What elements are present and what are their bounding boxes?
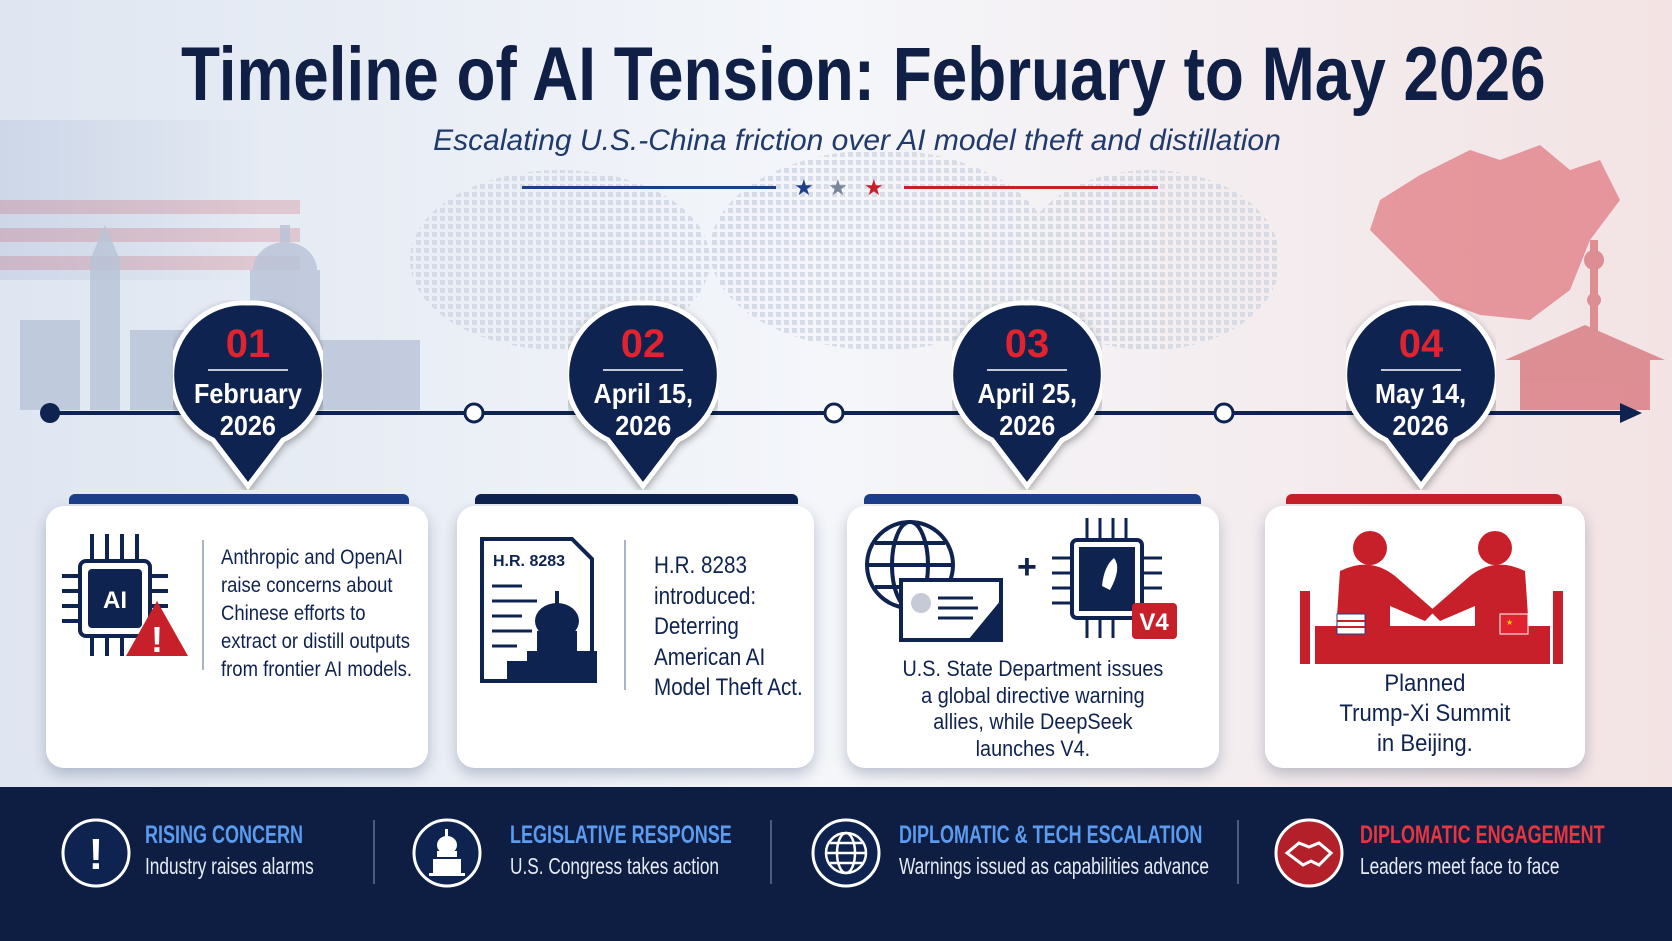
card 2 bbox=[457, 506, 814, 768]
icon: globe and directive bbox=[865, 520, 1003, 642]
pin 01: 01 bbox=[226, 322, 270, 366]
icon: bill document with capitol: H.R. 8283 bbox=[493, 553, 565, 570]
text block 4: Trump-Xi Summit bbox=[1340, 700, 1510, 727]
pin 03: April 25, bbox=[977, 378, 1077, 409]
pin 04: May 14, bbox=[1375, 378, 1467, 409]
subtitle: Escalating U.S.-China friction over AI model theft and distillation bbox=[433, 124, 1281, 157]
text block 1: raise concerns about bbox=[221, 574, 393, 597]
icon: plus: + bbox=[1017, 548, 1037, 586]
legend: rising concern bbox=[62, 818, 314, 888]
pin 04: 04 bbox=[1399, 322, 1443, 366]
text block 1: from frontier AI models. bbox=[221, 658, 412, 681]
pin 01 bbox=[173, 300, 323, 490]
divider with stars: ★ bbox=[828, 175, 848, 200]
icon: AI chip with warning: AI bbox=[103, 587, 127, 614]
icon: bill document with capitol bbox=[480, 537, 597, 683]
text block 2: Deterring bbox=[654, 613, 739, 640]
text block 3: allies, while DeepSeek bbox=[933, 709, 1133, 734]
pin 02: April 15, bbox=[593, 378, 693, 409]
pin 01: February bbox=[194, 378, 302, 409]
text block 1: extract or distill outputs bbox=[221, 630, 410, 653]
US buildings silhouette bbox=[20, 225, 420, 410]
legend: diplomatic & tech escalation: DIPLOMATIC & TECH ESCALATION bbox=[899, 821, 1202, 849]
text block 3: U.S. State Department issues bbox=[903, 656, 1163, 681]
China map bbox=[1370, 145, 1620, 320]
icon: rocket chip V4: V4 bbox=[1139, 609, 1169, 636]
text block 1: Anthropic and OpenAI bbox=[221, 546, 403, 569]
text block 2: H.R. 8283 bbox=[654, 552, 747, 579]
text block 2: introduced: bbox=[654, 582, 756, 610]
text block 2: Model Theft Act. bbox=[654, 674, 803, 701]
legend: diplomatic & tech escalation: Warnings issued as capabilities advance bbox=[899, 853, 1209, 879]
text block 2 bbox=[654, 552, 803, 701]
icon: rocket chip V4 bbox=[1052, 518, 1177, 639]
pin 03: 03 bbox=[1005, 322, 1049, 366]
icon: handshake summit: ★ bbox=[1506, 618, 1513, 627]
text block 3: a global directive warning bbox=[921, 682, 1145, 708]
legend: rising concern: ! bbox=[89, 830, 103, 879]
legend: diplomatic engagement: Leaders meet face to face bbox=[1360, 853, 1559, 879]
divider with stars: ★ bbox=[794, 175, 814, 200]
legend: legislative response: LEGISLATIVE RESPONSE bbox=[510, 821, 732, 849]
legend: rising concern: RISING CONCERN bbox=[145, 821, 303, 849]
legend: rising concern: Industry raises alarms bbox=[145, 853, 314, 879]
text block 3 bbox=[903, 656, 1163, 760]
timeline axis bbox=[40, 402, 1642, 424]
pin 02: 02 bbox=[621, 322, 665, 366]
pin 03 bbox=[952, 300, 1102, 490]
legend: diplomatic & tech escalation bbox=[812, 818, 1209, 888]
card 1 bbox=[46, 506, 428, 768]
card bars bbox=[69, 494, 409, 504]
card 4 bbox=[1265, 506, 1585, 768]
pin 01: 2026 bbox=[220, 410, 276, 441]
pin 04: 2026 bbox=[1393, 410, 1449, 441]
text block 1 bbox=[221, 546, 412, 681]
text block 3: launches V4. bbox=[976, 736, 1090, 760]
legend: diplomatic engagement: DIPLOMATIC ENGAGEMENT bbox=[1360, 821, 1605, 849]
icon: AI chip with warning: ! bbox=[151, 619, 163, 660]
divider with stars bbox=[522, 175, 1158, 200]
text block 2: American AI bbox=[654, 644, 765, 670]
icon: handshake summit bbox=[1300, 531, 1563, 664]
text block 4 bbox=[1340, 670, 1510, 757]
legend: legislative response: U.S. Congress takes action bbox=[510, 853, 719, 879]
pin 02: 2026 bbox=[615, 410, 671, 441]
legend: legislative response bbox=[412, 818, 732, 888]
divider with stars: ★ bbox=[864, 175, 884, 200]
pin 03: 2026 bbox=[999, 410, 1055, 441]
text block 4: in Beijing. bbox=[1377, 730, 1473, 757]
card 3 bbox=[847, 506, 1219, 768]
title: Timeline of AI Tension: February to May 2026 bbox=[181, 32, 1545, 117]
icon: AI chip with warning bbox=[62, 534, 188, 660]
pin 04 bbox=[1346, 300, 1496, 490]
text block 1: Chinese efforts to bbox=[221, 602, 366, 625]
bottom band bbox=[0, 787, 1672, 941]
pin 02 bbox=[568, 300, 718, 490]
legend: diplomatic engagement bbox=[1274, 818, 1605, 888]
text block 4: Planned bbox=[1384, 670, 1466, 697]
